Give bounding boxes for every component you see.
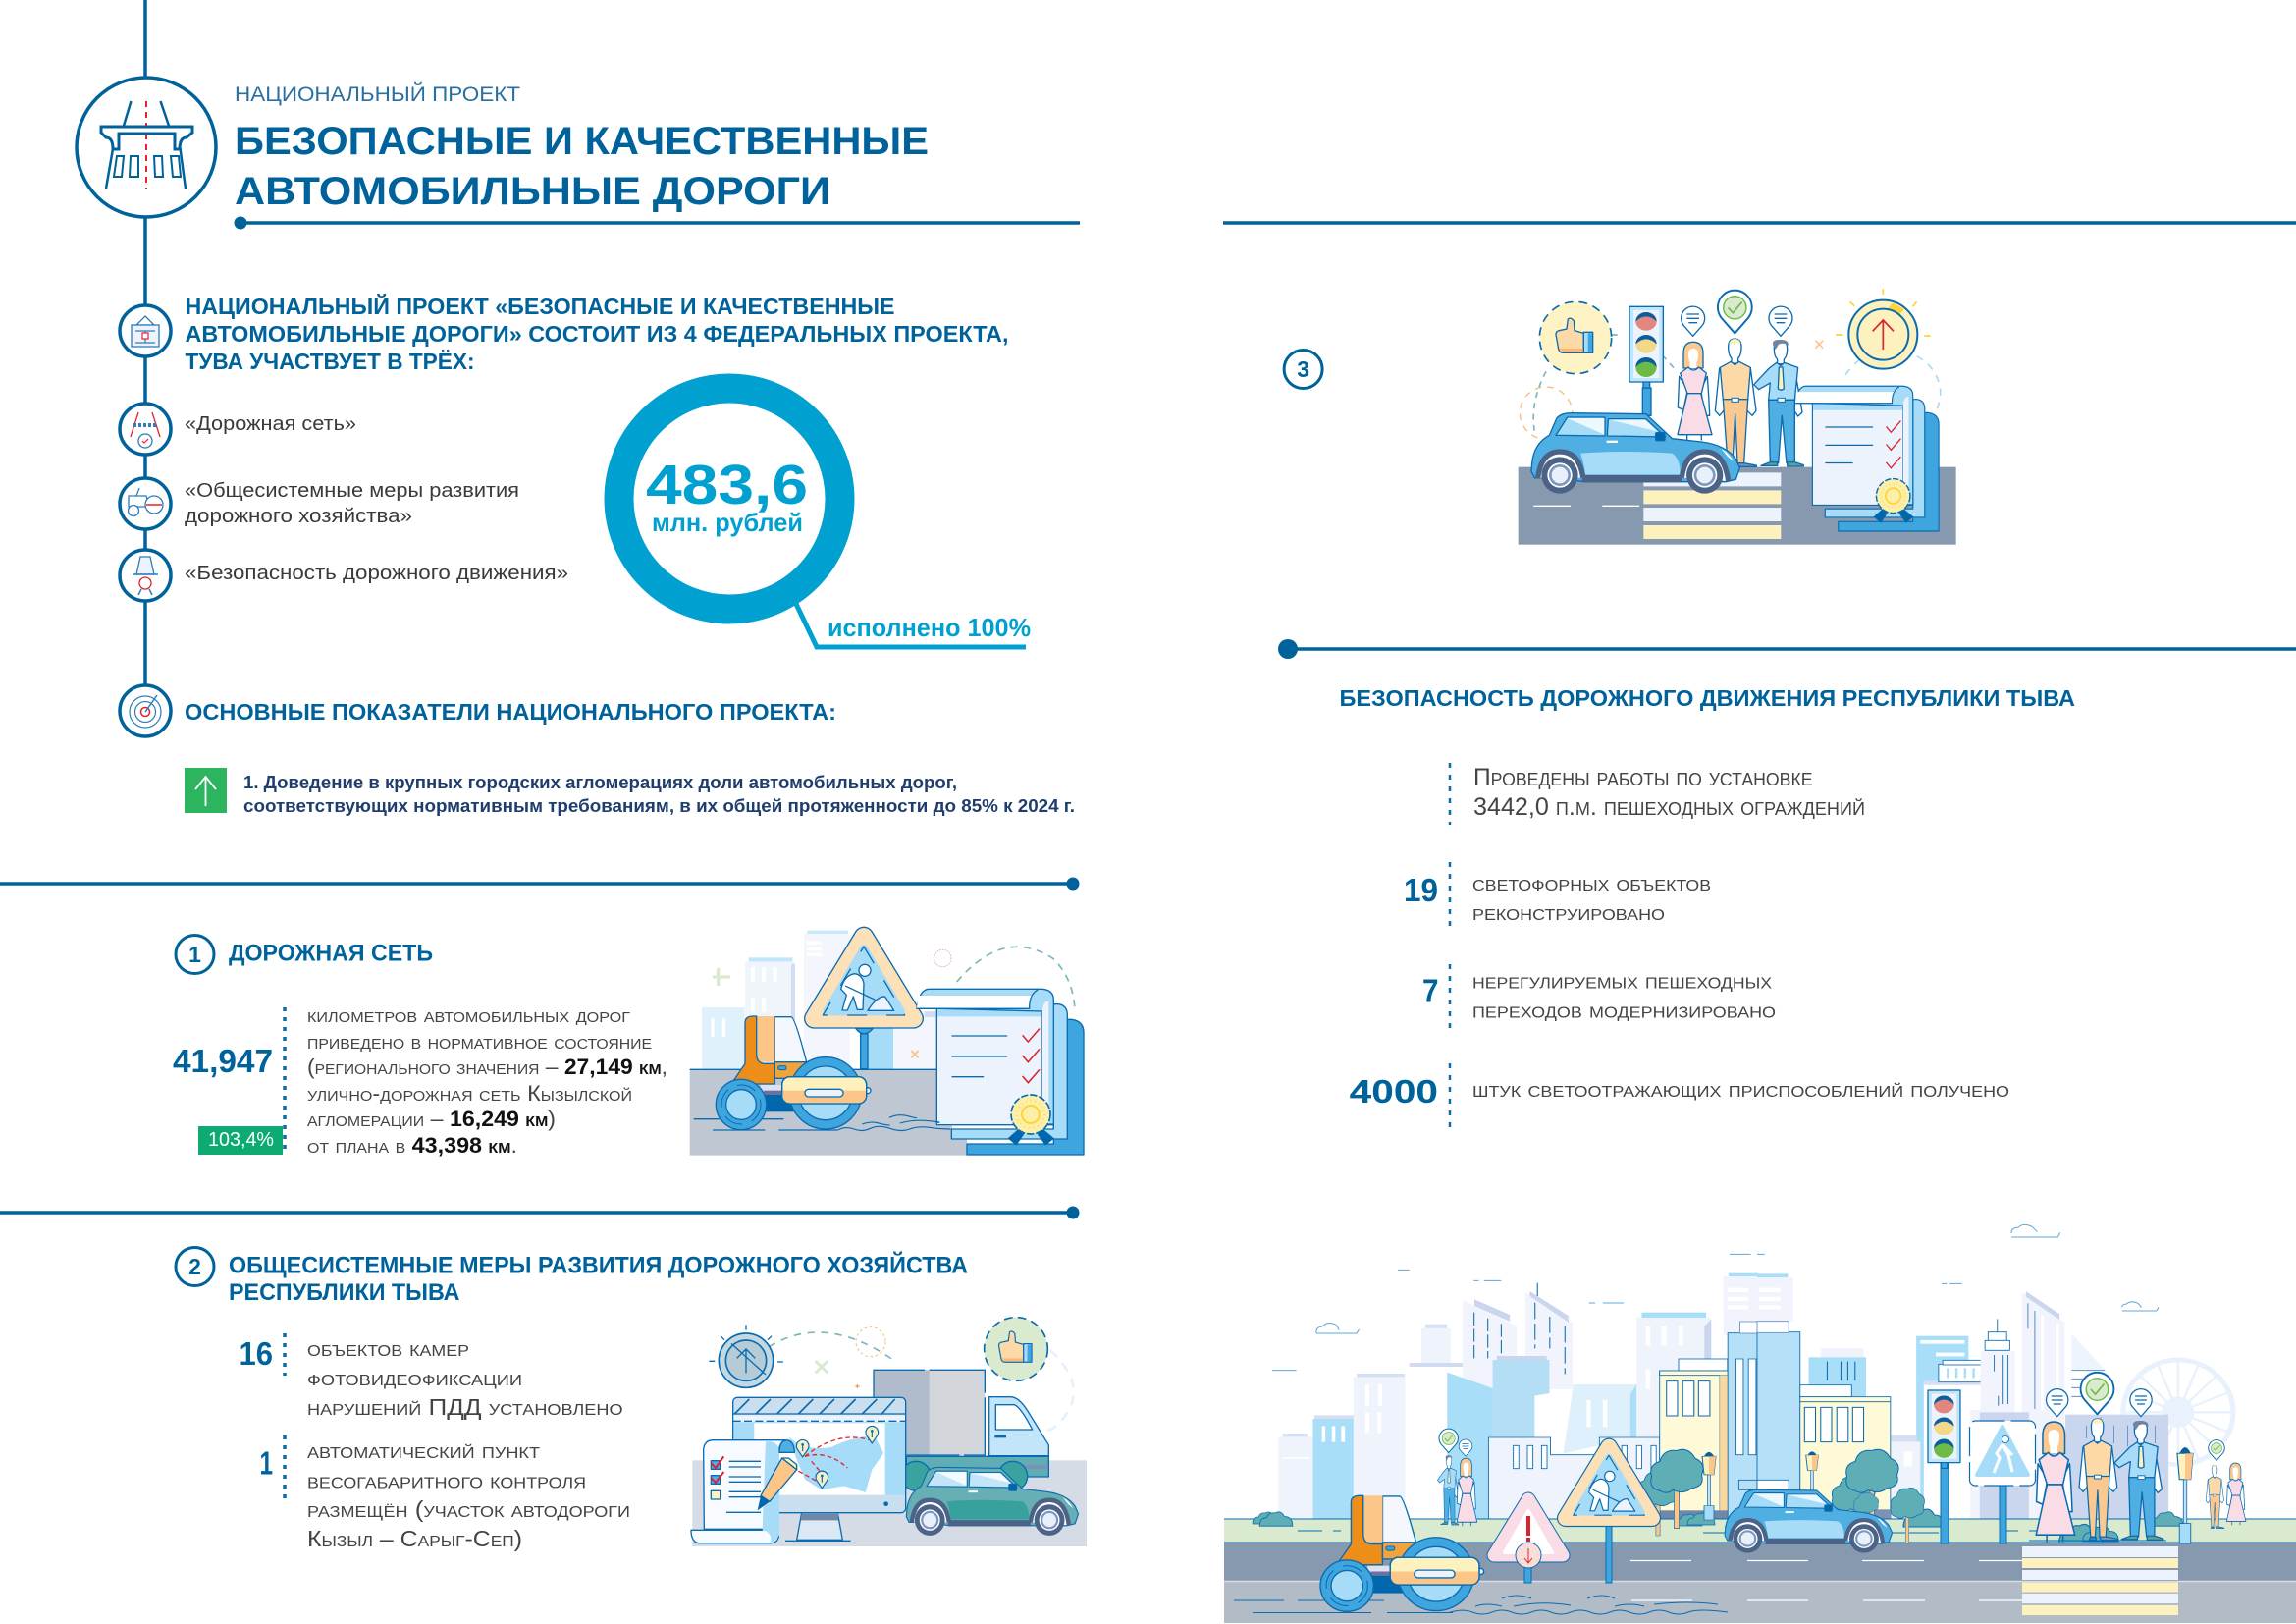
heading: project intro: ТУВА УЧАСТВУЕТ В ТРЁХ: <box>185 349 475 374</box>
donut: budget figure <box>618 389 840 609</box>
stat: 1 weight control point: 1 <box>259 1445 273 1481</box>
right top rule <box>1223 221 2296 225</box>
icon: system measures <box>120 478 171 529</box>
heading: project intro: НАЦИОНАЛЬНЫЙ ПРОЕКТ «БЕЗОПАСНЫЕ И КАЧЕСТВЕННЫЕ <box>185 293 895 319</box>
heading: section 1: ДОРОЖНАЯ СЕТЬ <box>229 941 433 967</box>
stat: 41,947 km: (регионального значения – 27,149 км, <box>307 1055 667 1079</box>
stat: 41,947 km: приведено в нормативное состояние <box>307 1029 652 1054</box>
callout: executed 100% <box>796 604 1031 647</box>
illustration: city left part background <box>1272 1254 1760 1520</box>
icon: green up arrow <box>185 768 227 813</box>
stat: 7 crossings: нерегулируемых пешеходных <box>1472 968 1772 994</box>
text: indicator 1: 1. Доведение в крупных городских агломерациях доли автомобильных дорог, <box>243 773 957 792</box>
stat: 16 camera sites: объектов камер <box>307 1335 469 1361</box>
stat: 4000 reflectors <box>1350 1063 2009 1132</box>
text: indicator 1: соответствующих нормативным требованиям, в их общей протяженности до 85% к 2024 г. <box>243 796 1075 816</box>
divider 2 <box>0 1206 1080 1219</box>
timeline spine <box>143 0 147 687</box>
stat: 1 weight control point <box>259 1435 630 1551</box>
stat: 16 camera sites: нарушений ПДД установлено <box>307 1394 623 1420</box>
illustration: city right part background <box>1757 1224 2233 1520</box>
stat: 1 weight control point: Кызыл – Сарыг-Сеп) <box>307 1526 522 1551</box>
title rule <box>234 216 1080 230</box>
stat: 16 camera sites: 16 <box>240 1335 273 1372</box>
title: БЕЗОПАСНЫЕ И КАЧЕСТВЕННЫЕ <box>235 120 929 163</box>
list item: road safety: «Безопасность дорожного движения» <box>185 563 568 584</box>
heading: section 2 <box>176 1247 968 1306</box>
donut: budget figure: млн. рублей <box>652 508 803 537</box>
heading: project intro <box>185 293 1009 374</box>
city: warning sign <box>1494 1499 1563 1583</box>
stat: 16 camera sites: фотовидеофиксации <box>307 1365 522 1390</box>
icon: road emblem <box>77 78 216 217</box>
stat: 19 traffic lights <box>1404 862 1711 930</box>
city: trees <box>1636 1449 1924 1543</box>
icon: road safety <box>120 550 171 601</box>
city: traffic light <box>1928 1390 1960 1543</box>
heading: road safety of Tuva: БЕЗОПАСНОСТЬ ДОРОЖНОГО ДВИЖЕНИЯ РЕСПУБЛИКИ ТЫВА <box>1339 685 2075 711</box>
title <box>235 82 929 213</box>
city: road roller <box>1320 1495 1484 1611</box>
stat: 19 traffic lights: 19 <box>1404 872 1438 908</box>
text: indicator 1 <box>243 773 1075 816</box>
donut: budget figure: 483,6 <box>646 454 808 516</box>
heading: section 2: РЕСПУБЛИКИ ТЫВА <box>229 1279 459 1306</box>
icon: target <box>120 685 171 736</box>
stat: 41,947 km: агломерации – 16,249 км) <box>307 1107 556 1131</box>
heading: section 1 <box>176 935 433 974</box>
list item: system measures: «Общесистемные меры развития <box>185 480 519 502</box>
city: pedestrian crossing sign <box>1969 1421 2036 1543</box>
heading: project intro: АВТОМОБИЛЬНЫЕ ДОРОГИ» СОСТОИТ ИЗ 4 ФЕДЕРАЛЬНЫХ ПРОЕКТА, <box>185 321 1009 347</box>
stat: 4000 reflectors: 4000 <box>1350 1073 1438 1110</box>
stat: pedestrian barriers: 3442,0 п.м. пешеходных ограждений <box>1473 793 1865 821</box>
stat: 4000 reflectors: штук светоотражающих приспособлений получено <box>1472 1076 2009 1102</box>
rule with dot: safety section <box>1278 639 2296 659</box>
heading: section 1: 1 <box>188 942 201 967</box>
title: АВТОМОБИЛЬНЫЕ ДОРОГИ <box>235 170 830 213</box>
stat: 7 crossings: 7 <box>1422 973 1439 1009</box>
stat: 41,947 km: улично-дорожная сеть Кызылской <box>307 1081 632 1106</box>
number badge 3: 3 <box>1297 356 1309 382</box>
city: blue car <box>1725 1489 1893 1553</box>
divider 1 <box>0 878 1080 890</box>
stat: 41,947 km: от плана в 43,398 км. <box>307 1133 517 1158</box>
heading: section 2: 2 <box>188 1254 201 1279</box>
stat: 41,947 km: 41,947 <box>173 1043 273 1079</box>
city: family with bubbles <box>1437 1429 1477 1526</box>
stat: 7 crossings <box>1422 964 1776 1031</box>
stat: 19 traffic lights: реконструировано <box>1472 899 1665 925</box>
icon: federal project <box>120 305 171 356</box>
callout: executed 100%: исполнено 100% <box>828 613 1031 642</box>
stat: 1 weight control point: весогабаритного контроля <box>307 1467 586 1492</box>
city: road works sign <box>1566 1447 1652 1583</box>
ground: grass and road <box>1224 1519 2296 1623</box>
stat: 1 weight control point: размещён (участок автодороги <box>307 1496 630 1522</box>
icon: road network <box>120 404 171 455</box>
stat: 1 weight control point: автоматический пункт <box>307 1437 540 1463</box>
stat: pedestrian barriers <box>1450 763 1865 825</box>
stat: 41,947 km: 103,4% <box>208 1129 274 1151</box>
city: main trio of people <box>2029 1373 2166 1542</box>
list item: road network: «Дорожная сеть» <box>185 413 356 435</box>
stat: 41,947 km: километров автомобильных дорог <box>307 1002 630 1027</box>
list item: system measures <box>185 480 519 527</box>
number badge 3 <box>1284 350 1322 389</box>
illustration: truck and monitor <box>691 1318 1087 1546</box>
heading: section 2: ОБЩЕСИСТЕМНЫЕ МЕРЫ РАЗВИТИЯ ДОРОЖНОГО ХОЗЯЙСТВА <box>229 1251 968 1278</box>
city: shrubs <box>1253 1509 2183 1543</box>
illustration: road safety team <box>1519 289 1956 545</box>
title: НАЦИОНАЛЬНЫЙ ПРОЕКТ <box>235 82 520 106</box>
city: children <box>2206 1440 2246 1529</box>
city: street lamps <box>1702 1447 2193 1543</box>
list item: system measures: дорожного хозяйства» <box>185 506 412 527</box>
stat: 41,947 km <box>173 1002 667 1158</box>
stat: 19 traffic lights: светофорных объектов <box>1472 870 1711 895</box>
stat: 7 crossings: переходов модернизировано <box>1472 998 1776 1023</box>
stat: 16 camera sites <box>240 1333 623 1420</box>
illustration: road works <box>690 931 1084 1156</box>
stat: pedestrian barriers: Проведены работы по установке <box>1473 764 1813 791</box>
heading: key indicators: ОСНОВНЫЕ ПОКАЗАТЕЛИ НАЦИОНАЛЬНОГО ПРОЕКТА: <box>185 699 836 725</box>
